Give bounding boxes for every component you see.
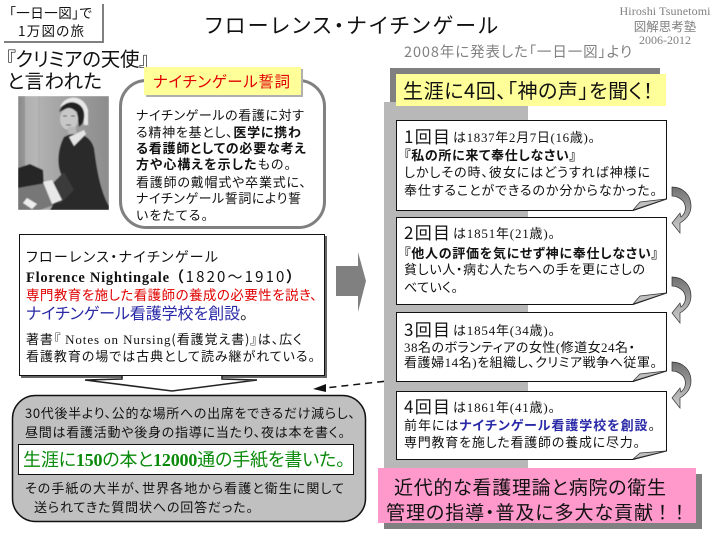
author credit: 図解思考塾 — [634, 16, 697, 35]
cap — [60, 98, 88, 125]
card: second call: は1851年(21歳)。 — [453, 223, 555, 242]
panel: Nightingale pledge — [120, 67, 324, 228]
pledge text: ナイチンゲール誓詞により誓 — [136, 188, 301, 207]
arrow: first to second call — [672, 187, 691, 233]
cloth on table — [18, 183, 54, 210]
card: first call: 奉仕することができるのか分からなかった。 — [404, 180, 657, 199]
hair — [59, 102, 84, 127]
arrow: biography down to writings — [85, 376, 257, 391]
card: second call: 『他人の評価を気にせず神に奉仕しなさい』 — [404, 243, 658, 262]
panel: biography — [20, 234, 327, 378]
author credit: Hiroshi Tsunetomi — [620, 4, 711, 18]
panel: biography: フローレンス・ナイチンゲール — [26, 247, 218, 267]
callout: conclusion: 近代的な看護理論と病院の衛生 — [394, 473, 666, 500]
callout: conclusion — [378, 468, 702, 529]
card: first call — [396, 120, 666, 210]
arrow: dashed link from third event — [313, 380, 396, 392]
table — [18, 164, 44, 190]
panel: writings: その手紙の大半が、世界各地から看護と衛生に関して — [25, 478, 344, 497]
panel: biography: Florence Nightingale — [26, 270, 170, 286]
eyes and mouth — [63, 116, 75, 125]
card: third call — [396, 312, 666, 382]
card: third call: は1854年(34歳)。 — [453, 320, 555, 339]
author credit: 2006-2012 — [639, 33, 691, 47]
card: second call: べていく。 — [404, 277, 458, 296]
card: third call: 3回目 — [404, 316, 450, 341]
panel: writings: 送られてきた質問状への回答だった。 — [34, 497, 253, 516]
card: fourth call: は1861年(41歳)。 — [453, 397, 555, 416]
pledge text: 方や心構えを示したもの。 — [136, 154, 291, 173]
badge: one drawing a day — [2, 2, 104, 43]
badge: one drawing a day: 1万図の旅 — [18, 20, 84, 40]
pledge text: いをたてる。 — [136, 205, 208, 224]
panel: biography: ナイチンゲール看護学校を創設。 — [26, 300, 248, 324]
card: fourth call — [396, 392, 666, 460]
collar — [69, 130, 86, 146]
heading bar: four divine calls — [384, 68, 666, 468]
heading: angel of Crimea: と言われた — [7, 65, 102, 94]
subtitle: source note: 2008年に発表した「一日一図」より — [404, 41, 632, 62]
card: first call: は1837年2月7日(16歳)。 — [453, 127, 595, 146]
card: second call — [396, 218, 666, 304]
label: Nightingale pledge: ナイチンゲール誓詞 — [153, 70, 290, 92]
panel: biography: 著書『 Notes on Nursing(看護覚え書)』は、広く — [26, 329, 302, 348]
card: first call: 1回目 — [404, 123, 450, 148]
card: third call: 38名のボランティアの女性(修道女24名・ — [404, 337, 635, 356]
card: third call: 看護婦14名)を組織し、クリミア戦争へ従軍。 — [404, 352, 657, 371]
author credit — [620, 4, 711, 47]
paper — [23, 198, 37, 209]
arrow: second to third call — [672, 277, 691, 323]
arrow: third to fourth call — [672, 362, 691, 408]
panel: writings — [12, 396, 366, 522]
callout: conclusion: 管理の指導・普及に多大な貢献 — [386, 498, 653, 525]
heading: angel of Crimea — [6, 43, 149, 94]
card: fourth call: 4回目 — [404, 393, 450, 418]
badge: one drawing a day: 「一日一図」で — [9, 2, 92, 22]
cuffs — [43, 180, 62, 204]
card: fourth call: 専門教育を施した看護師の養成に尽力。 — [404, 432, 640, 451]
pledge text: る精神を基とし、医学に携わ — [136, 122, 301, 141]
card: second call: 貧しい人・病む人たちへの手を更にさしの — [404, 259, 645, 278]
card: first call: しかしその時、彼女にはどうすれば神様に — [404, 162, 650, 181]
card: second call: 2回目 — [404, 219, 450, 244]
callout: 150 books and 12000 letters: 生涯に150の本と12000通の手紙を書いた。 — [23, 446, 345, 472]
face — [60, 108, 78, 130]
callout: conclusion: ！！ — [653, 498, 689, 525]
label: Nightingale pledge — [144, 67, 303, 97]
pledge text: る看護師としての必要な考え — [136, 138, 306, 157]
photo: portrait of Nightingale — [18, 96, 109, 210]
card: fourth call: 前年にはナイチンゲール看護学校を創設。 — [404, 415, 655, 434]
panel: writings: 30代後半より、公的な場所への出席をできるだけ減らし、 — [25, 403, 355, 422]
heading bar: four divine calls: 生涯に4回、「神の声」を聞く！ — [403, 75, 653, 104]
arrow: biography to life events — [336, 252, 366, 312]
title: フローレンス・ナイチンゲール — [205, 10, 498, 40]
heading: angel of Crimea: 『クリミアの天使』 — [6, 43, 149, 72]
dress — [50, 134, 109, 210]
pledge text — [136, 105, 306, 224]
panel: biography: 専門教育を施した看護師の養成の必要性を説き、 — [26, 284, 317, 304]
card: first call: 『私の所に来て奉仕しなさい』 — [404, 145, 576, 164]
panel: biography: （1820〜1910） — [176, 266, 294, 287]
pledge text: ナイチンゲールの看護に対す — [136, 105, 305, 124]
pledge text: 看護師の戴帽式や卒業式に、 — [136, 172, 306, 191]
panel: biography: 看護教育の場では古典として読み継がれている。 — [26, 346, 315, 365]
panel: writings: 昼間は看護活動や後身の指導に当たり、夜は本を書く。 — [25, 422, 345, 441]
